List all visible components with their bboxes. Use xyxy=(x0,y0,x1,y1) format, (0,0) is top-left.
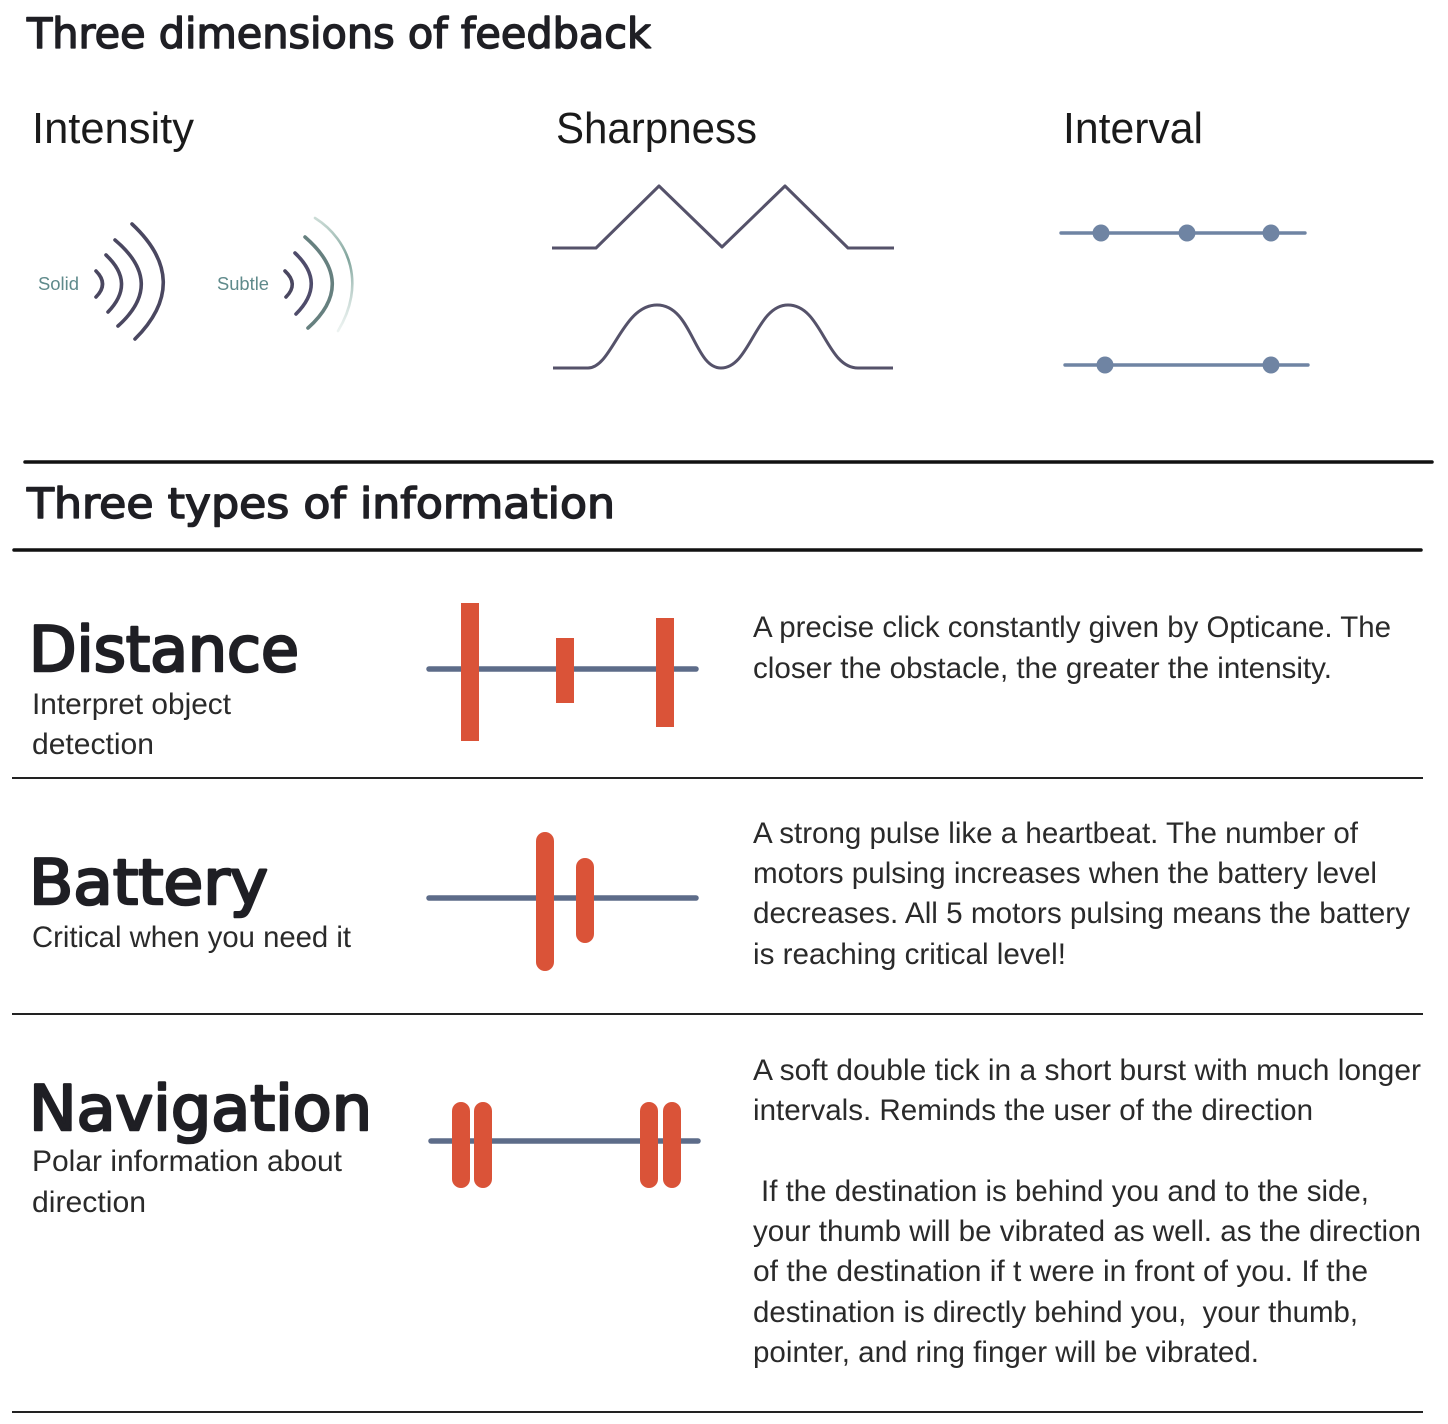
text: battery description: A strong pulse like a heartbeat. The number of xyxy=(753,817,1359,850)
icon: solid vibration waves xyxy=(38,224,163,339)
text: distance description: closer the obstacle, the greater the intensity. xyxy=(753,652,1332,685)
panel: navigation xyxy=(29,1054,1421,1369)
chart: navigation pulse pattern xyxy=(431,1102,698,1188)
text: battery description: motors pulsing increases when the battery level xyxy=(753,857,1377,890)
text: navigation description: intervals. Reminds the user of the direction xyxy=(753,1094,1313,1127)
heading: Distance: Distance xyxy=(29,613,299,686)
chart: distance pulse pattern xyxy=(429,603,696,741)
heading: Navigation: Navigation xyxy=(29,1072,372,1145)
panel: intensity xyxy=(32,104,352,339)
text: distance subtitle xyxy=(32,688,232,761)
text: distance description: A precise click constantly given by Opticane. The xyxy=(753,611,1391,644)
panel: interval xyxy=(1061,104,1308,374)
chart: battery pulse pattern xyxy=(429,832,696,971)
text: battery description xyxy=(753,817,1410,971)
text: battery description: decreases. All 5 motors pulsing means the battery xyxy=(753,897,1410,930)
chart: two-dot interval line xyxy=(1065,356,1308,374)
text: navigation description: pointer, and ring finger will be vibrated. xyxy=(753,1336,1259,1369)
text: navigation description: A soft double tick in a short burst with much longer xyxy=(753,1054,1421,1087)
icon: subtle vibration waves xyxy=(217,218,352,331)
text: navigation description xyxy=(753,1054,1421,1369)
heading: Three types of information: Three types of information xyxy=(26,479,615,528)
text: navigation subtitle: Polar information about xyxy=(32,1145,343,1178)
text: battery description: is reaching critical level! xyxy=(753,938,1066,971)
text: distance subtitle: detection xyxy=(32,728,154,761)
heading: Intensity: Intensity xyxy=(32,104,194,153)
text: navigation description: of the destination if t were in front of you. If the xyxy=(753,1255,1368,1288)
heading: Battery: Battery xyxy=(29,846,268,919)
panel: distance xyxy=(29,603,1391,761)
chart: sharp triangular wave xyxy=(552,186,894,248)
text: distance subtitle: Interpret object xyxy=(32,688,232,721)
text: battery subtitle: Critical when you need it xyxy=(32,921,352,954)
text: navigation subtitle: direction xyxy=(32,1186,146,1219)
text: navigation subtitle xyxy=(32,1145,343,1219)
heading: Interval: Interval xyxy=(1063,104,1203,153)
icon: subtle vibration waves: Subtle xyxy=(217,274,269,294)
text: navigation description: your thumb will be vibrated as well. as the direction xyxy=(753,1215,1421,1248)
text: navigation description: If the destination is behind you and to the side, xyxy=(761,1175,1369,1208)
title: Three dimensions of feedback: Three dimensions of feedback xyxy=(26,9,652,58)
chart: three-dot interval line xyxy=(1061,224,1305,242)
chart: smooth rounded wave xyxy=(553,305,893,368)
heading: Sharpness: Sharpness xyxy=(556,104,757,153)
text: distance description xyxy=(753,611,1391,685)
panel: battery xyxy=(29,817,1410,971)
panel: sharpness xyxy=(552,104,894,368)
text: navigation description: destination is directly behind you, your thumb, xyxy=(753,1296,1358,1329)
icon: solid vibration waves: Solid xyxy=(38,274,79,294)
